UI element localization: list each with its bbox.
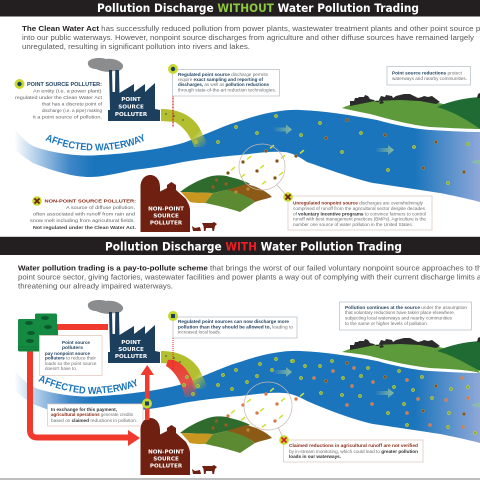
fields (180, 175, 272, 212)
callout: left point source polluter: that has a discrete point of (42, 102, 103, 107)
icon: lower factory, point source polluter: POINT (121, 340, 141, 346)
icon: lower factory, point source polluter (88, 300, 160, 363)
callout: point source polluters pay: polluters (62, 345, 84, 350)
callout: pollution continues at the source: to the same or higher levels of pollution. (345, 321, 428, 326)
callout: regulated point sources can discharge more: pollution than they should be allowed to, leading to (178, 324, 294, 330)
pollution dots: point source (195, 115, 469, 184)
callout: left point source polluter (14, 79, 103, 120)
title bar: without trading: Pollution Discharge WITHOUT Water Pollution Trading (97, 1, 419, 15)
flow arrows (273, 367, 480, 408)
callout: point source reductions: waterways and nearby communities. (392, 76, 467, 81)
icon: lower barn with fields and cows: SOURCE (153, 456, 179, 462)
pollution dots: nonpoint source (226, 118, 466, 184)
callout: pollution continues at the source: Pollution continues at the source under the assumption (345, 305, 468, 310)
callout: left non-point source polluter: A source of diffuse pollution, (66, 205, 135, 210)
callout: left non-point source polluter (30, 196, 136, 230)
callout: unregulated nonpoint source, with magnifier: Unregulated nonpoint source discharges are overwhelmingly (293, 200, 424, 206)
arrow: red credits from farm to factory (140, 365, 154, 420)
title bar: with trading: Pollution Discharge WITH Water Pollution Trading (105, 240, 402, 254)
callout: left point source polluter: An entity (i.e. a power plant) (33, 89, 102, 94)
icon: upper barn with fields and cows: SOURCE (153, 213, 179, 219)
icon: stacks of money (18, 314, 58, 352)
icon: lower factory, point source polluter: POLLUTER (115, 354, 148, 360)
callout: point source polluters pay: polluters to reduce their (45, 356, 97, 361)
callout: point source reductions: Point source reductions protect (392, 70, 463, 76)
callout: regulated point source: through state-of-the-art reduction technologies. (178, 87, 276, 92)
callout: pollution continues at the source: subjecting local waterways and nearby communities (345, 316, 452, 320)
callout: left point source polluter: discharge (i.e. a pipe) making (42, 108, 102, 113)
icon: upper factory, point source polluter (88, 58, 160, 121)
callout: regulated point source: require exact sampling and reporting of (178, 77, 264, 82)
callout: left non-point source polluter: Not regulated under the Clean Water Act. (33, 225, 136, 230)
callout: regulated point sources can discharge more: Regulated point sources can now discharge more (178, 319, 290, 324)
callout: point source polluters pay: Point source (62, 340, 91, 345)
callout: point source polluters pay: loads so the point source (45, 361, 97, 366)
icon: upper barn with fields and cows: POLLUTER (150, 220, 183, 226)
callout: regulated point source: Regulated point source discharge permits (178, 72, 268, 77)
icon: upper factory, point source polluter: POLLUTER (115, 112, 148, 118)
callout: pollution continues at the source: that voluntary reductions have taken place elsewhere, (345, 310, 455, 315)
icon: lower pipe discharge with red plume (161, 351, 209, 397)
title bar: with trading (0, 237, 480, 255)
pollution dots: orange and brown (226, 361, 470, 429)
callout: claimed reductions not verified, with magnifier: Claimed reductions in agricultural runoff are not verified (289, 443, 418, 448)
callout: unregulated nonpoint source, with magnifier (239, 144, 432, 230)
callout: regulated point source: discharges, as well as pollution reductions (178, 82, 270, 87)
callout: unregulated nonpoint source, with magnifier: of voluntary incentive programs to convince farmers to control (293, 211, 426, 216)
callout: left point source polluter: POINT SOURCE POLLUTER: (27, 82, 102, 88)
intro text: Clean Water Act: The Clean Water Act has successfully reduced pollution from power plants, wastewater treatment plants and other point source polluters (22, 24, 480, 33)
icon: lower barn with fields and cows: POLLUTER (150, 464, 183, 470)
intro text: pay-to-pollute: point source sector, giving factories, wastewater facilities and power plants a way out of complying with their current discharge limits and (18, 272, 480, 282)
scene: upper waterway (16, 93, 480, 202)
callout: left non-point source polluter: often associated with runoff from rain and (33, 212, 135, 217)
hills (342, 93, 480, 129)
callout: claimed reductions not verified, with magnifier (244, 382, 423, 462)
callout: left point source polluter: regulated under the Clean Water Act (15, 95, 103, 100)
callout: in exchange for payment: agricultural operations generate credits (51, 412, 133, 417)
intro text: pay-to-pollute: Water pollution trading is a pay-to-pollute scheme that brings the worst of our failed voluntary nonpoint source approaches to the (18, 264, 480, 272)
icon: lower barn with fields and cows (140, 416, 272, 475)
callout: regulated point sources can discharge more (168, 311, 297, 370)
label: affected waterway: AFFECTED WATERWAY (38, 376, 137, 394)
hills (342, 337, 480, 373)
callout: in exchange for payment: based on claimed reductions in pollution. (51, 418, 137, 423)
intro text: Clean Water Act: unregulated, resulting in significant pollution into rivers and lakes. (22, 42, 250, 51)
callout: point source polluters pay: doesn't have to. (45, 366, 77, 371)
intro text: pay-to-pollute (18, 264, 480, 290)
flow arrows (273, 124, 480, 165)
callout: unregulated nonpoint source, with magnifier: number one source of water pollution in the United States. (293, 222, 413, 227)
callout: point source polluters pay (40, 336, 102, 376)
callout: claimed reductions not verified, with magnifier: by in-stream monitoring, which could lead to greater pollution (289, 449, 418, 454)
icon: upper barn with fields and cows (140, 175, 272, 232)
icon: upper barn with fields and cows: NON-POINT (148, 206, 184, 212)
callout: claimed reductions not verified, with magnifier: loads in our waterways. (289, 454, 341, 459)
callout: regulated point sources can discharge more: increased local loads. (178, 330, 221, 334)
icon: upper factory, point source polluter: POINT (121, 97, 141, 103)
pipe discharge (161, 109, 209, 147)
intro text: Clean Water Act: into our public waterways. However, nonpoint source discharges from agriculture and other diffuse sources have remained largely (22, 33, 474, 42)
callout: point source polluters pay: pay nonpoint source (45, 351, 91, 356)
callout: left point source polluter: it a point source of pollution. (33, 115, 102, 120)
label: affected waterway: AFFECTED WATERWAY (45, 134, 144, 151)
icon: upper factory, point source polluter: SOURCE (118, 105, 144, 111)
callout: in exchange for payment: In exchange for this payment, (51, 407, 117, 412)
river (14, 110, 480, 202)
callout: regulated point source (168, 64, 280, 127)
pollution dots: credited sources (217, 358, 476, 434)
icon: lower factory, point source polluter: SOURCE (118, 347, 144, 353)
fields (180, 416, 272, 453)
callout: point source reductions (387, 66, 470, 85)
icon: lower barn with fields and cows: NON-POINT (148, 450, 184, 456)
intro text: pay-to-pollute: threatening our already impaired waterways. (18, 282, 173, 290)
callout: unregulated nonpoint source, with magnifier: runoff with best management practices (BMPs). Agriculture is the (293, 217, 427, 222)
cows (192, 222, 217, 231)
scene: lower waterway (16, 337, 480, 443)
callout: in exchange for payment (48, 404, 143, 426)
callout: pollution continues at the source (340, 302, 472, 330)
river (14, 351, 480, 443)
arrow: red payment route from factory to farm (30, 327, 140, 446)
callout: unregulated nonpoint source, with magnifier: comprised of runoff from the agricultural sector despite decades (293, 206, 425, 211)
callout: left non-point source polluter: NON-POINT SOURCE POLLUTER: (44, 199, 136, 205)
callout: left non-point source polluter: snow melt including from agricultural fields. (30, 218, 135, 223)
cows (192, 465, 217, 474)
title bar: without trading (0, 0, 480, 16)
intro text: Clean Water Act (22, 24, 480, 51)
